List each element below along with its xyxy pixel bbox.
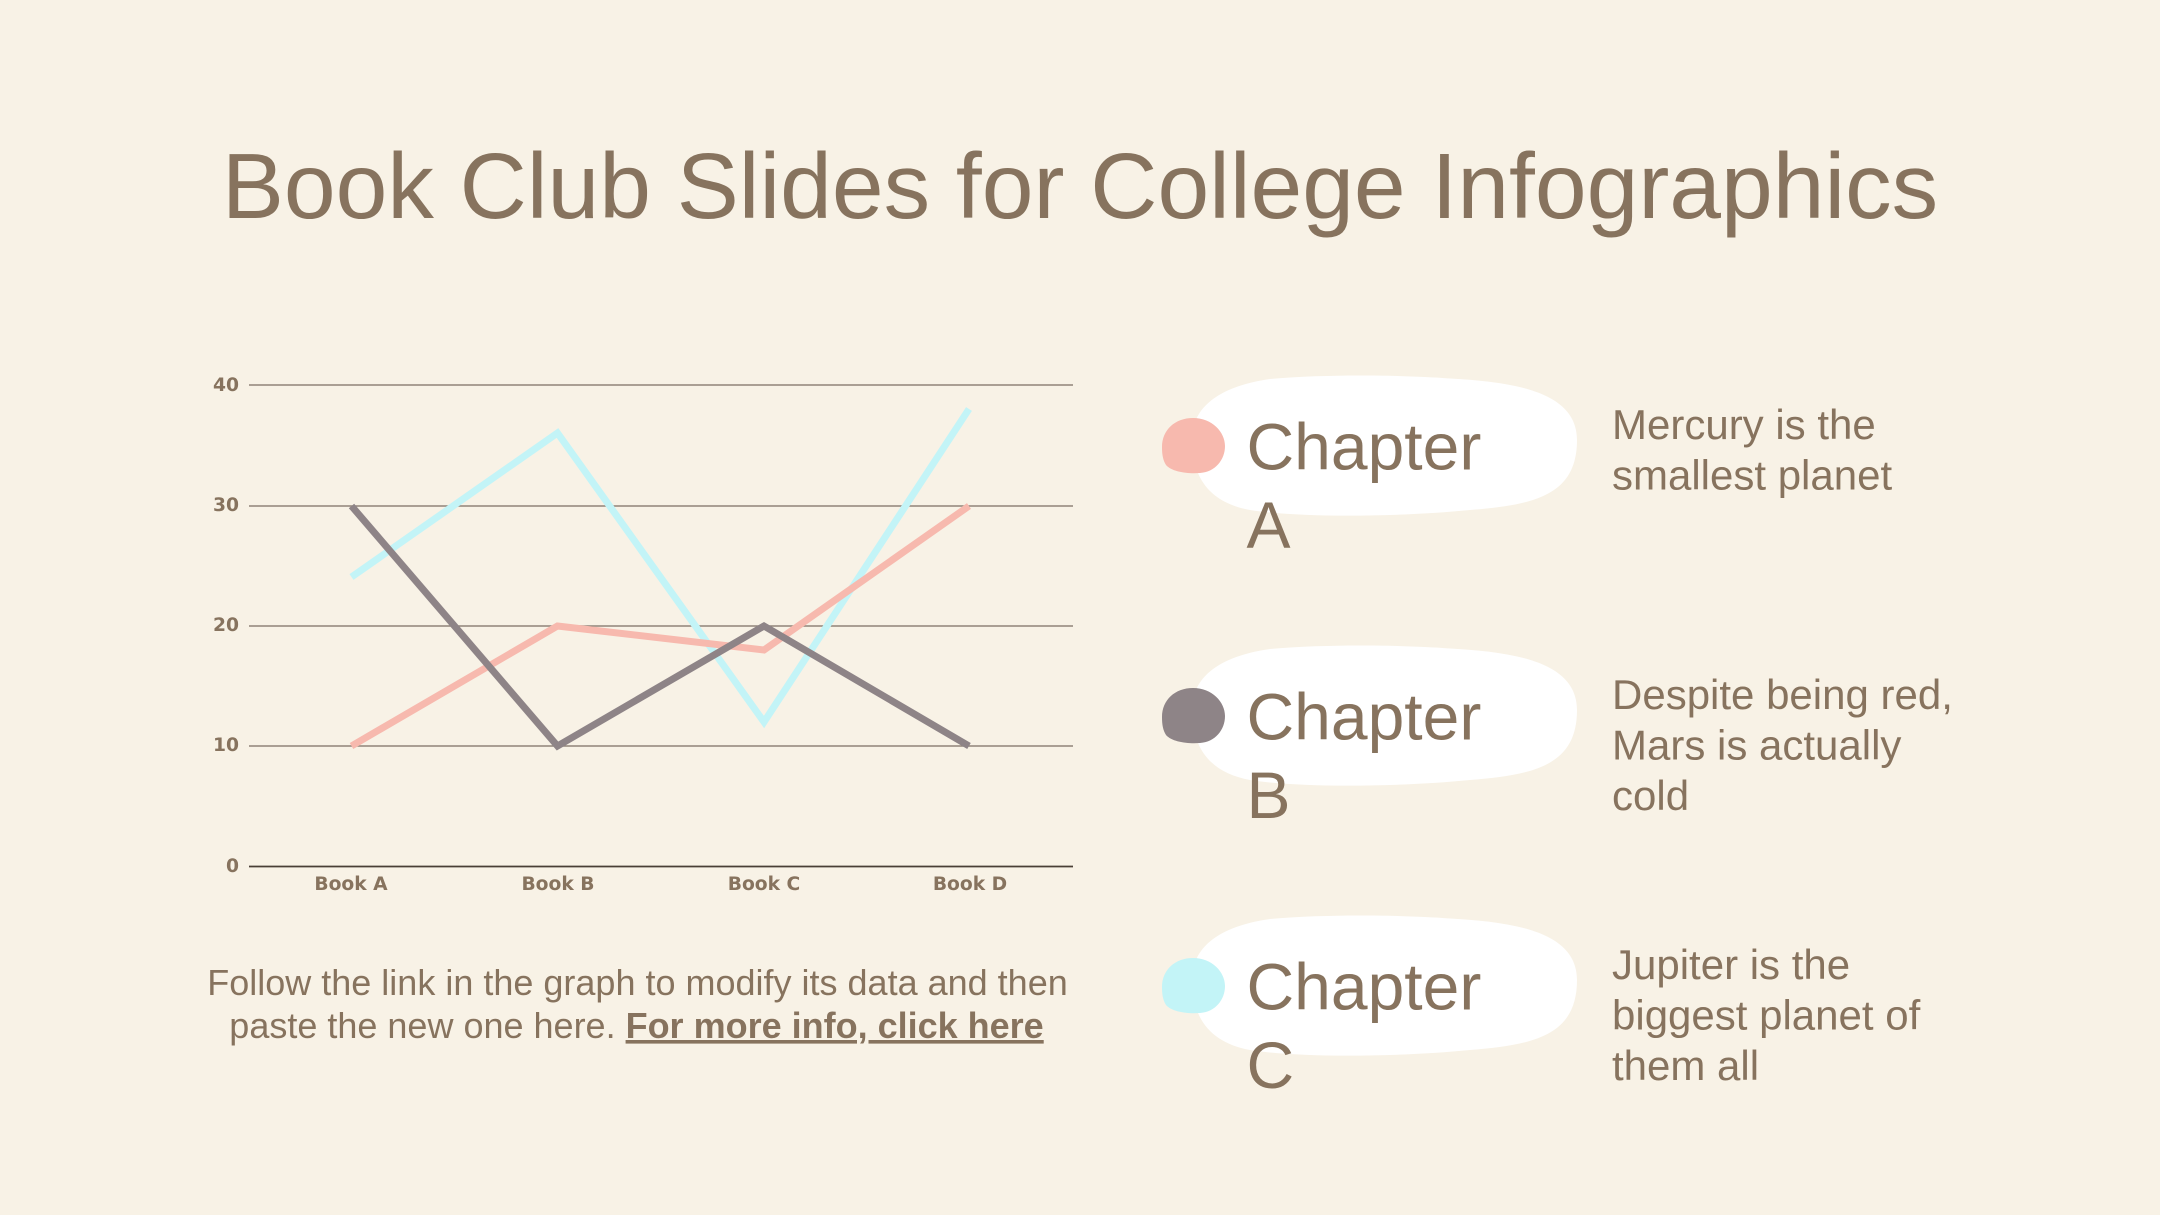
y axis labels: 40: [213, 375, 239, 396]
chapter C bubble: [1192, 916, 1577, 1056]
chapter B label: Chapter: [1246, 680, 1481, 754]
chapter B description: cold: [1612, 772, 1689, 819]
chapter C description: Jupiter is the: [1612, 941, 1850, 988]
chart caption: paste the new one here. For more info, click here: [229, 1005, 1044, 1046]
series: pink line: [352, 506, 969, 746]
y axis labels: 20: [213, 615, 239, 636]
chapter A label: A: [1246, 488, 1291, 562]
chapter A description: Mercury is the: [1612, 401, 1876, 448]
chapter A row: [1162, 376, 1892, 562]
chapter A marker: [1162, 418, 1225, 473]
chapter B description: Despite being red,: [1612, 671, 1953, 718]
chapter C marker: [1162, 958, 1225, 1013]
chapter C label: Chapter: [1246, 950, 1481, 1024]
chapter C row: [1162, 916, 1921, 1102]
chart caption: [207, 962, 1068, 1046]
chapter C description: biggest planet of: [1612, 992, 1921, 1038]
x axis labels: Book B: [521, 874, 595, 895]
grid lines: [249, 385, 1073, 746]
chapter A bubble: [1192, 376, 1577, 516]
series: cyan line: [352, 409, 969, 722]
chapter B bubble: [1192, 646, 1577, 786]
y axis labels: [213, 375, 239, 877]
x axis labels: Book D: [933, 874, 1007, 895]
x axis labels: [314, 874, 1007, 895]
chapter B label: B: [1246, 758, 1291, 832]
chapter B row: [1162, 646, 1953, 832]
title: Book Club Slides for College Infographics: [222, 134, 1938, 238]
series: gray line: [352, 506, 969, 746]
x axis: [249, 866, 1073, 868]
chapter A description: smallest planet: [1612, 452, 1892, 498]
x axis labels: Book C: [728, 874, 800, 895]
x axis labels: Book A: [314, 874, 388, 895]
chapter C label: C: [1246, 1028, 1294, 1102]
chapter A label: Chapter: [1246, 410, 1481, 484]
y axis labels: 0: [226, 856, 239, 877]
chart caption: Follow the link in the graph to modify its data and then: [207, 962, 1068, 1003]
y axis labels: 10: [213, 735, 239, 756]
chapter B description: Mars is actually: [1612, 722, 1901, 768]
chapter B marker: [1162, 688, 1225, 743]
chapter C description: them all: [1612, 1042, 1759, 1089]
y axis labels: 30: [213, 495, 239, 516]
line chart: [213, 375, 1073, 895]
